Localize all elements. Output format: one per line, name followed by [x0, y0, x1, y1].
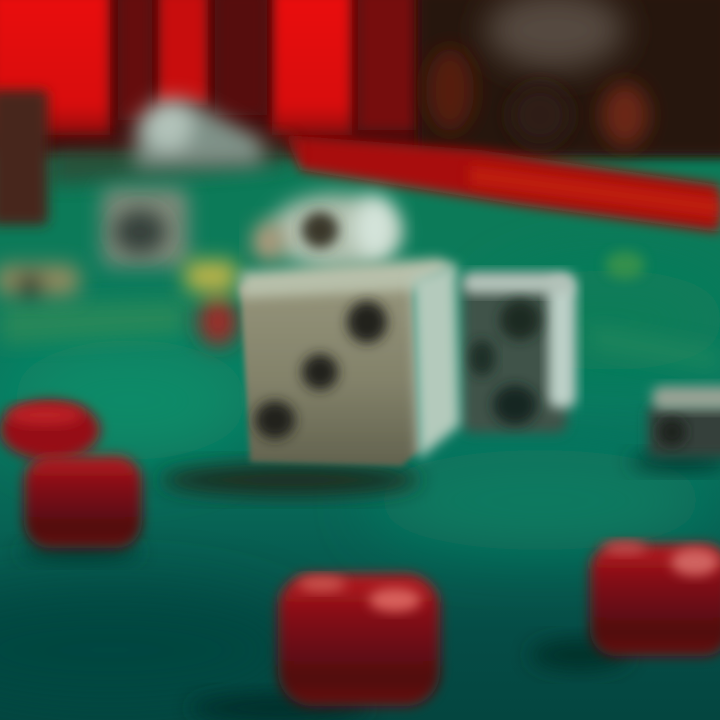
red chips, left — [0, 400, 142, 562]
far right die — [630, 386, 720, 472]
distant die, left — [102, 188, 188, 266]
table rail — [285, 135, 720, 232]
main die shadow — [160, 464, 420, 496]
distant white die, top — [135, 98, 262, 168]
background: red curtains and dark crowd — [0, 0, 720, 232]
main die — [240, 258, 460, 466]
die pips — [255, 301, 387, 439]
far left brown block — [0, 90, 48, 225]
red chip, bottom right — [530, 541, 720, 671]
right die — [462, 272, 576, 433]
left yellow and white chips — [0, 260, 238, 346]
red chip, bottom centre — [190, 574, 440, 720]
die behind main die — [252, 194, 401, 270]
